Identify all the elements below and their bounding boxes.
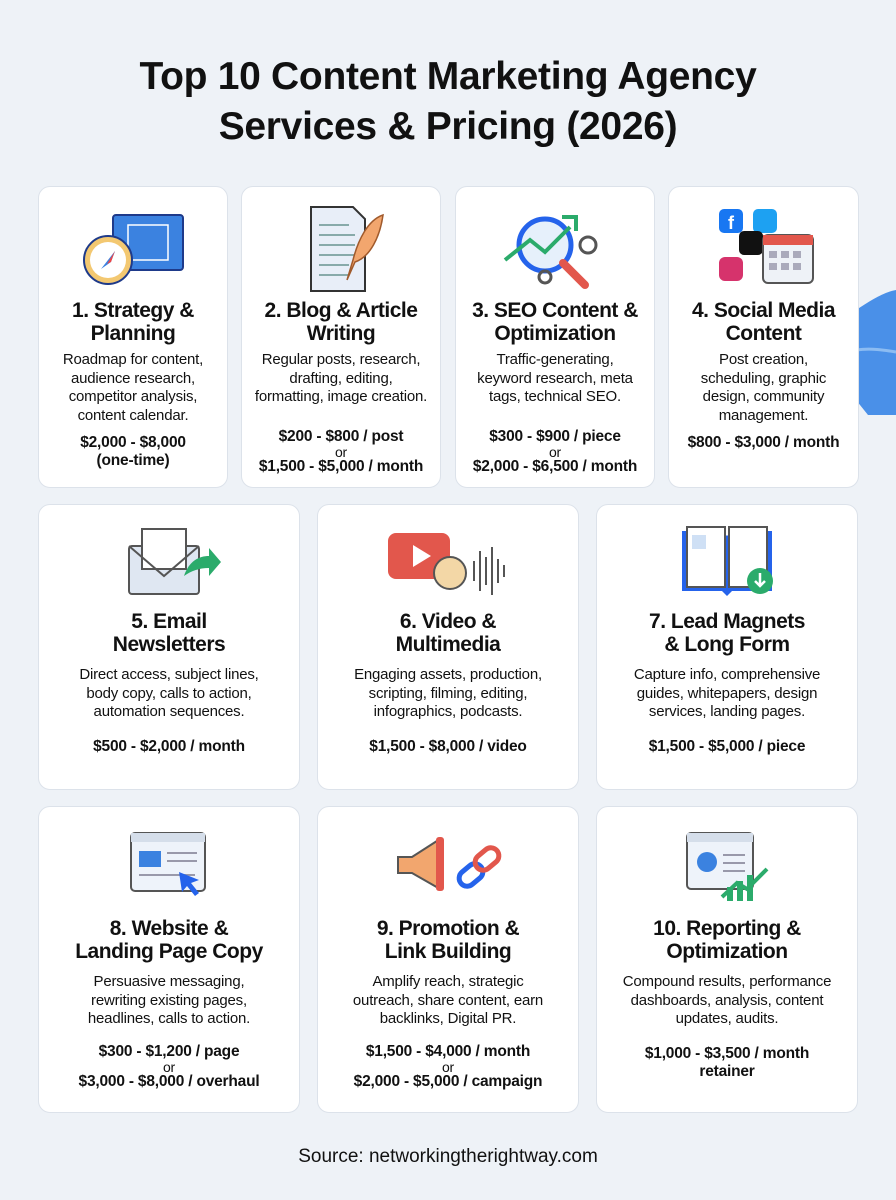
price: $1,500 - $5,000 / piece	[649, 738, 805, 755]
heading: 6. Video &	[400, 610, 496, 633]
heading	[692, 299, 836, 345]
decorative blue shape	[859, 290, 896, 415]
description: management.	[719, 407, 808, 424]
description	[623, 973, 831, 1027]
heading: Optimization	[494, 322, 616, 345]
description: body copy, calls to action,	[86, 685, 252, 702]
card 7	[596, 504, 858, 790]
description: audience research,	[71, 370, 195, 387]
description	[634, 666, 820, 720]
heading: Writing	[307, 322, 375, 345]
description: tags, technical SEO.	[489, 388, 621, 405]
description: design, community	[703, 388, 824, 405]
card 6	[317, 504, 579, 790]
description: automation sequences.	[94, 703, 244, 720]
description: Capture info, comprehensive	[634, 666, 820, 683]
description: keyword research, meta	[477, 370, 633, 387]
title: Services & Pricing (2026)	[219, 105, 677, 148]
description	[88, 973, 250, 1027]
price: or	[163, 1059, 175, 1075]
heading	[472, 299, 638, 345]
description: formatting, image creation.	[255, 388, 427, 405]
description: services, landing pages.	[649, 703, 805, 720]
card 4	[668, 186, 859, 488]
description	[63, 351, 203, 424]
description: headlines, calls to action.	[88, 1010, 250, 1027]
card 8	[38, 806, 300, 1113]
heading: 10. Reporting &	[653, 917, 801, 940]
description: updates, audits.	[676, 1010, 778, 1027]
card 5	[38, 504, 300, 790]
price: $1,500 - $4,000 / month $2,000 - $5,000 / campaign	[354, 1043, 542, 1090]
heading	[396, 610, 501, 656]
icon: webpage with cursor	[130, 832, 206, 896]
price: $300 - $900 / piece $2,000 - $6,500 / month	[473, 428, 637, 475]
icon: social media: f	[728, 213, 734, 233]
heading	[113, 610, 225, 656]
description: dashboards, analysis, content	[631, 992, 823, 1009]
source: Source: networkingtherightway.com	[298, 1146, 598, 1167]
card 1	[38, 186, 228, 488]
heading	[265, 299, 418, 345]
heading: 1. Strategy &	[72, 299, 194, 322]
card 9	[317, 806, 579, 1113]
price: $200 - $800 / post $1,500 - $5,000 / month	[259, 428, 423, 475]
price	[645, 1045, 809, 1080]
heading: 4. Social Media	[692, 299, 835, 322]
description: Amplify reach, strategic	[372, 973, 524, 990]
title	[140, 55, 757, 148]
card 3	[455, 186, 655, 488]
description: competitor analysis,	[69, 388, 197, 405]
description: Regular posts, research,	[262, 351, 420, 368]
icon: map and compass	[83, 214, 184, 285]
description: Traffic-generating,	[496, 351, 614, 368]
description	[701, 351, 826, 424]
heading: Optimization	[666, 940, 788, 963]
heading: Newsletters	[113, 633, 225, 656]
description: Post creation,	[719, 351, 808, 368]
description: scripting, filming, editing,	[369, 685, 527, 702]
price: $800 - $3,000 / month	[688, 434, 839, 451]
heading: 5. Email	[131, 610, 207, 633]
description: outreach, share content, earn	[353, 992, 543, 1009]
heading	[653, 917, 801, 963]
description	[79, 666, 259, 720]
icon: social media	[719, 209, 814, 284]
heading: 9. Promotion &	[377, 917, 519, 940]
heading: & Long Form	[664, 633, 790, 656]
icon: video and audio	[388, 533, 505, 595]
price: $300 - $1,200 / page $3,000 - $8,000 / overhaul	[79, 1043, 259, 1090]
heading	[377, 917, 519, 963]
price: or	[442, 1059, 454, 1075]
description: scheduling, graphic	[701, 370, 826, 387]
price: retainer	[699, 1063, 755, 1080]
icon: document and quill	[310, 206, 384, 292]
heading: Link Building	[385, 940, 511, 963]
heading: Content	[726, 322, 801, 345]
heading	[72, 299, 194, 345]
description	[354, 666, 542, 720]
price: $2,000 - $8,000	[80, 434, 186, 451]
title: Top 10 Content Marketing Agency	[140, 55, 756, 98]
heading: 3. SEO Content &	[472, 299, 638, 322]
heading: 2. Blog & Article	[265, 299, 417, 322]
price: $500 - $2,000 / month	[93, 738, 245, 755]
price: $1,000 - $3,500 / month	[645, 1045, 809, 1062]
heading: 7. Lead Magnets	[649, 610, 805, 633]
description: Engaging assets, production,	[354, 666, 542, 683]
description: guides, whitepapers, design	[637, 685, 817, 702]
icon: megaphone and link	[397, 837, 502, 891]
description	[353, 973, 543, 1027]
description	[255, 351, 427, 405]
price	[80, 434, 186, 469]
price: (one-time)	[97, 452, 169, 469]
heading: Planning	[91, 322, 175, 345]
description: drafting, editing,	[289, 370, 393, 387]
price: $1,500 - $8,000 / video	[369, 738, 527, 755]
heading: Landing Page Copy	[75, 940, 263, 963]
heading: 8. Website &	[110, 917, 228, 940]
heading: Multimedia	[396, 633, 500, 656]
icon: magnifier with chart	[504, 215, 598, 289]
description: infographics, podcasts.	[374, 703, 522, 720]
card 10	[596, 806, 858, 1113]
description: Persuasive messaging,	[94, 973, 244, 990]
icon: envelope	[128, 528, 221, 595]
description: Direct access, subject lines,	[79, 666, 259, 683]
icon: dashboard with chart	[686, 832, 768, 901]
icon: open book	[682, 526, 773, 596]
price: or	[549, 444, 561, 460]
description: Compound results, performance	[623, 973, 831, 990]
heading	[649, 610, 805, 656]
description: rewriting existing pages,	[91, 992, 247, 1009]
description: content calendar.	[78, 407, 188, 424]
description: Roadmap for content,	[63, 351, 203, 368]
price: or	[335, 444, 347, 460]
heading	[75, 917, 264, 963]
description	[477, 351, 633, 405]
description: backlinks, Digital PR.	[380, 1010, 516, 1027]
card 2	[241, 186, 441, 488]
